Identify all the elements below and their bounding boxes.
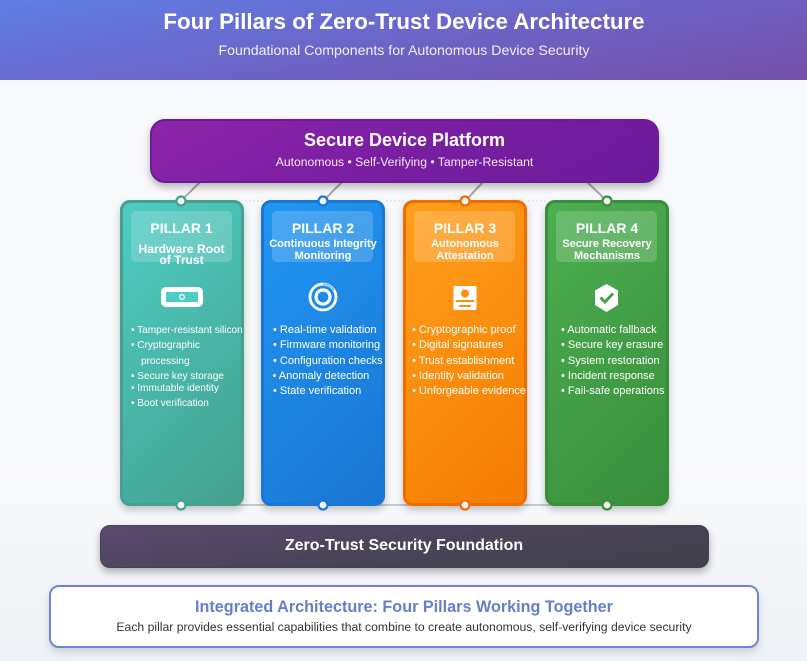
panel: pillar 3 <box>403 200 527 506</box>
pillar 3 capabilities: • Digital signatures <box>412 339 503 351</box>
panel: secure device platform <box>150 119 659 183</box>
pillar 2 capabilities: • Firmware monitoring <box>273 339 380 351</box>
pillar 3 name: Autonomous <box>431 238 499 250</box>
callout heading: Integrated Architecture: Four Pillars Working Together <box>195 598 613 616</box>
pillar 4 capabilities: • Incident response <box>561 370 655 382</box>
foundation label: Zero-Trust Security Foundation <box>285 537 523 554</box>
pillar 1 label: PILLAR 1 <box>150 220 213 236</box>
pillar 2 capabilities: • Real-time validation <box>273 324 377 336</box>
pillar 4 name: Mechanisms <box>574 250 640 262</box>
pillar 1 capabilities: • Immutable identity <box>131 383 219 394</box>
pillar 3 capabilities <box>412 324 526 397</box>
platform title: Secure Device Platform <box>304 130 505 150</box>
pillar 3 label: PILLAR 3 <box>434 220 496 236</box>
icon: certificate <box>454 286 476 310</box>
pillar 2 heading box <box>272 211 373 262</box>
platform subtitle: Autonomous • Self-Verifying • Tamper-Resistant <box>276 155 533 169</box>
header banner <box>0 0 807 80</box>
pillar 1 name: Hardware Root <box>138 242 225 256</box>
pillar 1 capabilities <box>131 325 243 409</box>
panel: pillar 2 <box>261 200 385 506</box>
panel: zero-trust foundation <box>100 525 709 568</box>
pillar 4 capabilities: • Secure key erasure <box>561 339 663 351</box>
callout: integrated architecture <box>49 585 759 648</box>
pillar 3 capabilities: • Trust establishment <box>412 355 514 367</box>
pillar 3 name: Attestation <box>436 250 494 262</box>
pillar 4 name <box>562 238 652 262</box>
pillar 2 name: Continuous Integrity <box>269 238 377 250</box>
pillar 4 capabilities: • Fail-safe operations <box>561 385 665 397</box>
panel: pillar 1 <box>120 200 244 506</box>
icon: chip <box>161 287 203 307</box>
pillar 1 name <box>138 242 225 267</box>
pillar 2 label: PILLAR 2 <box>292 220 354 236</box>
title: Four Pillars of Zero-Trust Device Architecture <box>163 9 645 34</box>
pillar 3 capabilities: • Cryptographic proof <box>412 324 516 336</box>
pillar 1 capabilities: • Secure key storage <box>131 371 224 382</box>
pillar 4 name: Secure Recovery <box>562 238 652 250</box>
icon: shield check <box>595 284 618 312</box>
pillar 1 heading box <box>130 211 232 262</box>
pillar 4 capabilities <box>561 324 665 397</box>
pillar 1 name: of Trust <box>159 253 204 267</box>
pillar 2 capabilities: • State verification <box>273 385 361 397</box>
pillar 2 capabilities: • Anomaly detection <box>272 370 369 382</box>
pillar 2 name: Monitoring <box>295 250 351 262</box>
pillar 1 capabilities: • Cryptographic <box>131 340 200 351</box>
pillar 1 capabilities: • Tamper-resistant silicon <box>131 325 243 336</box>
pillar 3 capabilities: • Unforgeable evidence <box>412 385 526 397</box>
pillar 4 capabilities: • System restoration <box>561 355 660 367</box>
pillar 2 capabilities <box>272 324 383 397</box>
pillar 4 label: PILLAR 4 <box>576 220 638 236</box>
icon: monitoring rings <box>308 282 338 312</box>
pillar 3 name <box>431 238 499 262</box>
pillar 1 capabilities: processing <box>141 356 190 367</box>
pillar 4 capabilities: • Automatic fallback <box>561 324 657 336</box>
panel: pillar 4 <box>545 200 669 506</box>
pillar 2 name <box>269 238 377 262</box>
subtitle: Foundational Components for Autonomous Device Security <box>218 42 590 58</box>
pillar 3 capabilities: • Identity validation <box>412 370 504 382</box>
pillar 4 heading box <box>556 211 657 262</box>
pillar 1 capabilities: • Boot verification <box>131 398 209 409</box>
pillar 2 capabilities: • Configuration checks <box>273 355 383 367</box>
callout text: Each pillar provides essential capabilities that combine to create autonomous, self-verifying device security <box>116 620 692 634</box>
pillar 3 heading box <box>414 211 515 262</box>
